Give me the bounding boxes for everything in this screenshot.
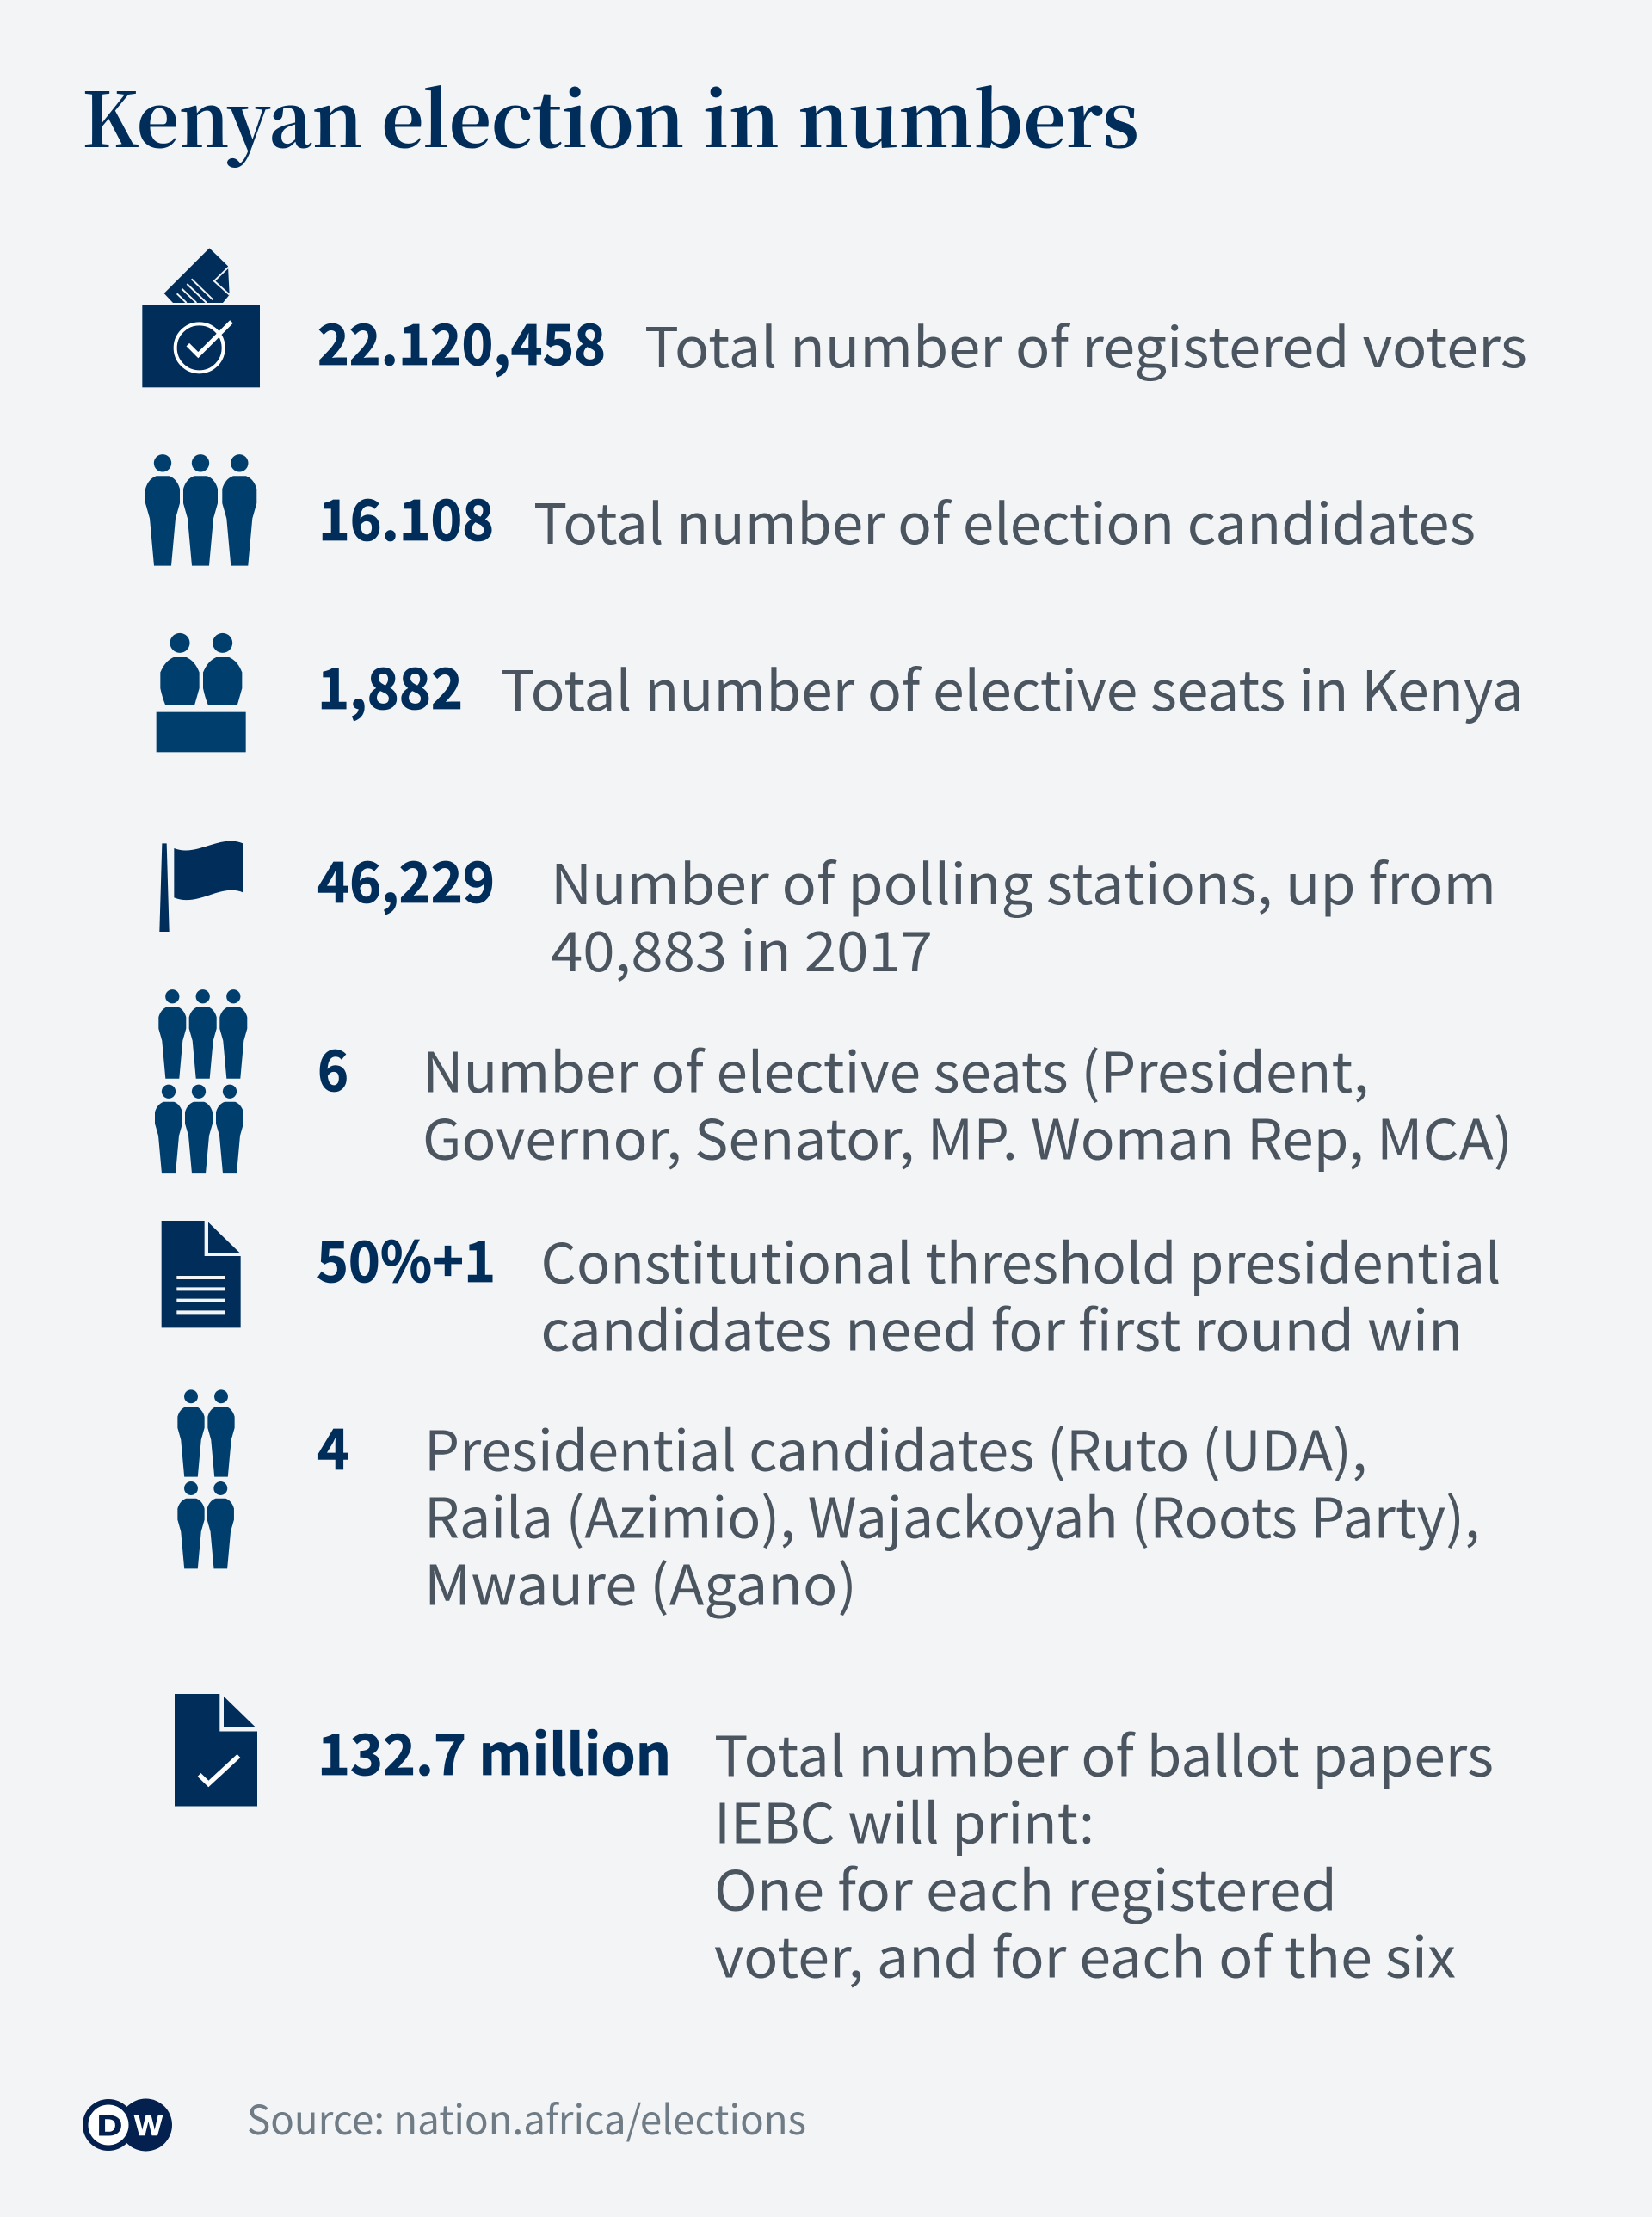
number: election candidates: 16.108 bbox=[318, 476, 494, 557]
text: number of elective seats: Governor, Senator, MP. Woman Rep, MCA) bbox=[422, 1096, 1513, 1175]
row: ballot papers bbox=[175, 1694, 1494, 1994]
icon: ballot box bbox=[142, 248, 260, 387]
number: threshold: 50%+1 bbox=[317, 1217, 496, 1298]
number: elective seats in Kenya: 1,882 bbox=[317, 644, 463, 725]
text: elective seats in Kenya: Total number of elective seats in Kenya bbox=[501, 648, 1524, 727]
text: polling stations bbox=[551, 841, 1496, 988]
icon: document with lines bbox=[162, 1221, 241, 1327]
text: presidential candidates: Mwaure (Agano) bbox=[424, 1542, 857, 1621]
text: election candidates: Total number of election candidates bbox=[533, 481, 1476, 560]
text: number of elective seats bbox=[422, 1029, 1513, 1175]
text: ballot papers bbox=[714, 1714, 1494, 1994]
row: number of elective seats bbox=[155, 989, 1513, 1175]
text: polling stations: Number of polling stations, up from bbox=[551, 841, 1496, 921]
row: registered voters bbox=[142, 248, 1527, 387]
text: number of elective seats: Number of elective seats (President, bbox=[422, 1029, 1369, 1108]
row: elective seats in Kenya bbox=[157, 633, 1524, 752]
text: polling stations: 40,883 in 2017 bbox=[551, 908, 933, 988]
row: polling stations bbox=[159, 838, 1496, 988]
icon: three people bbox=[145, 454, 256, 566]
number: six: 6 bbox=[317, 1026, 348, 1107]
icon: seated people bbox=[157, 633, 246, 752]
text: presidential candidates bbox=[424, 1407, 1480, 1621]
text: registered voters: Total number of registered voters bbox=[644, 305, 1527, 384]
row: constitutional threshold bbox=[162, 1217, 1501, 1366]
logo: DW bbox=[83, 2099, 172, 2151]
logo: DW: W bbox=[134, 2109, 163, 2141]
number: registered voters: 22.120,458 bbox=[317, 300, 606, 381]
number: polling stations: 46,229 bbox=[317, 838, 495, 919]
icon: six people bbox=[155, 989, 247, 1173]
title: Kenyan election in numbers bbox=[82, 61, 1139, 169]
number: four: 4 bbox=[317, 1405, 349, 1486]
text: threshold bbox=[540, 1220, 1501, 1366]
text: ballot papers: IEBC will print: bbox=[714, 1781, 1094, 1860]
source: Source: nation.africa/elections bbox=[247, 2087, 806, 2146]
logo: DW: D bbox=[97, 2109, 122, 2141]
icon: flag bbox=[159, 841, 243, 932]
row: presidential candidates bbox=[177, 1389, 1480, 1621]
text: presidential candidates: Raila (Azimio), Wajackoyah (Roots Party), bbox=[424, 1475, 1480, 1554]
text: threshold: Constitutional threshold presidential bbox=[540, 1220, 1501, 1299]
text: presidential candidates: Presidential candidates (Ruto (UDA), bbox=[424, 1407, 1367, 1487]
icon: four people bbox=[177, 1389, 235, 1568]
text: ballot papers: One for each registered bbox=[714, 1848, 1337, 1927]
row: election candidates bbox=[145, 454, 1476, 566]
icon: document with check bbox=[175, 1694, 257, 1807]
text: ballot papers: voter, and for each of the six bbox=[714, 1915, 1456, 1994]
text: threshold: candidates need for first round win bbox=[540, 1287, 1463, 1366]
number: ballot papers: 132.7 million bbox=[317, 1710, 671, 1791]
text: ballot papers: Total number of ballot papers bbox=[714, 1714, 1494, 1793]
